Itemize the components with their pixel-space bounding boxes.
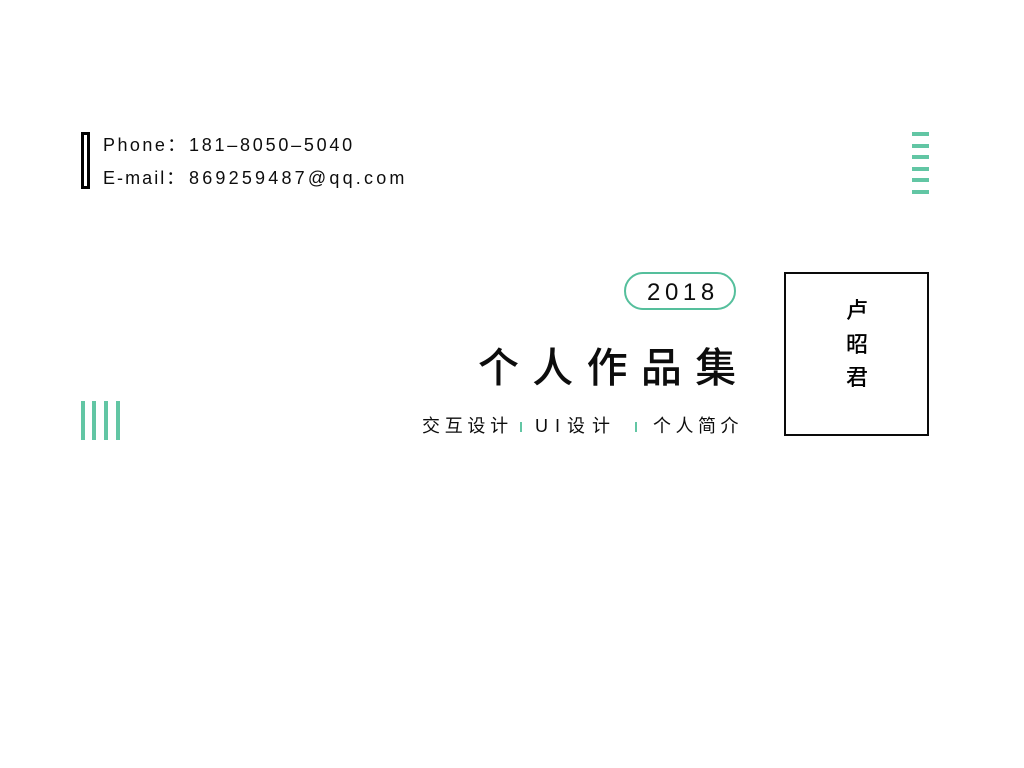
text: phone number <box>103 135 355 155</box>
text: phone number: Phone： <box>103 135 188 155</box>
year badge <box>624 272 736 310</box>
text: year: 2018 <box>647 279 719 306</box>
divider mark: green tick one <box>520 422 522 432</box>
text: subtitle UI design: UI设计 <box>535 416 617 436</box>
text: subtitle interaction design: 交互设计 <box>422 416 513 436</box>
text: vertical name: 卢 <box>846 298 868 323</box>
name panel: black outlined square <box>784 272 929 436</box>
divider mark: green tick two <box>635 422 637 432</box>
icon: green horizontal stripes <box>912 132 929 194</box>
text: vertical name: 君 <box>846 365 868 390</box>
text: email address: 869259487@qq.com <box>189 168 408 188</box>
text: vertical name: 昭 <box>846 332 868 356</box>
text: subtitle personal intro: 个人简介 <box>653 416 743 436</box>
text: email address: E-mail： <box>103 168 186 188</box>
icon: black outlined contact bar <box>81 132 90 189</box>
text: vertical name <box>846 298 868 390</box>
icon: green vertical stripes <box>81 401 120 440</box>
text: phone number: 181–8050–5040 <box>189 135 355 155</box>
heading: portfolio title: 个人作品集 <box>478 345 750 391</box>
